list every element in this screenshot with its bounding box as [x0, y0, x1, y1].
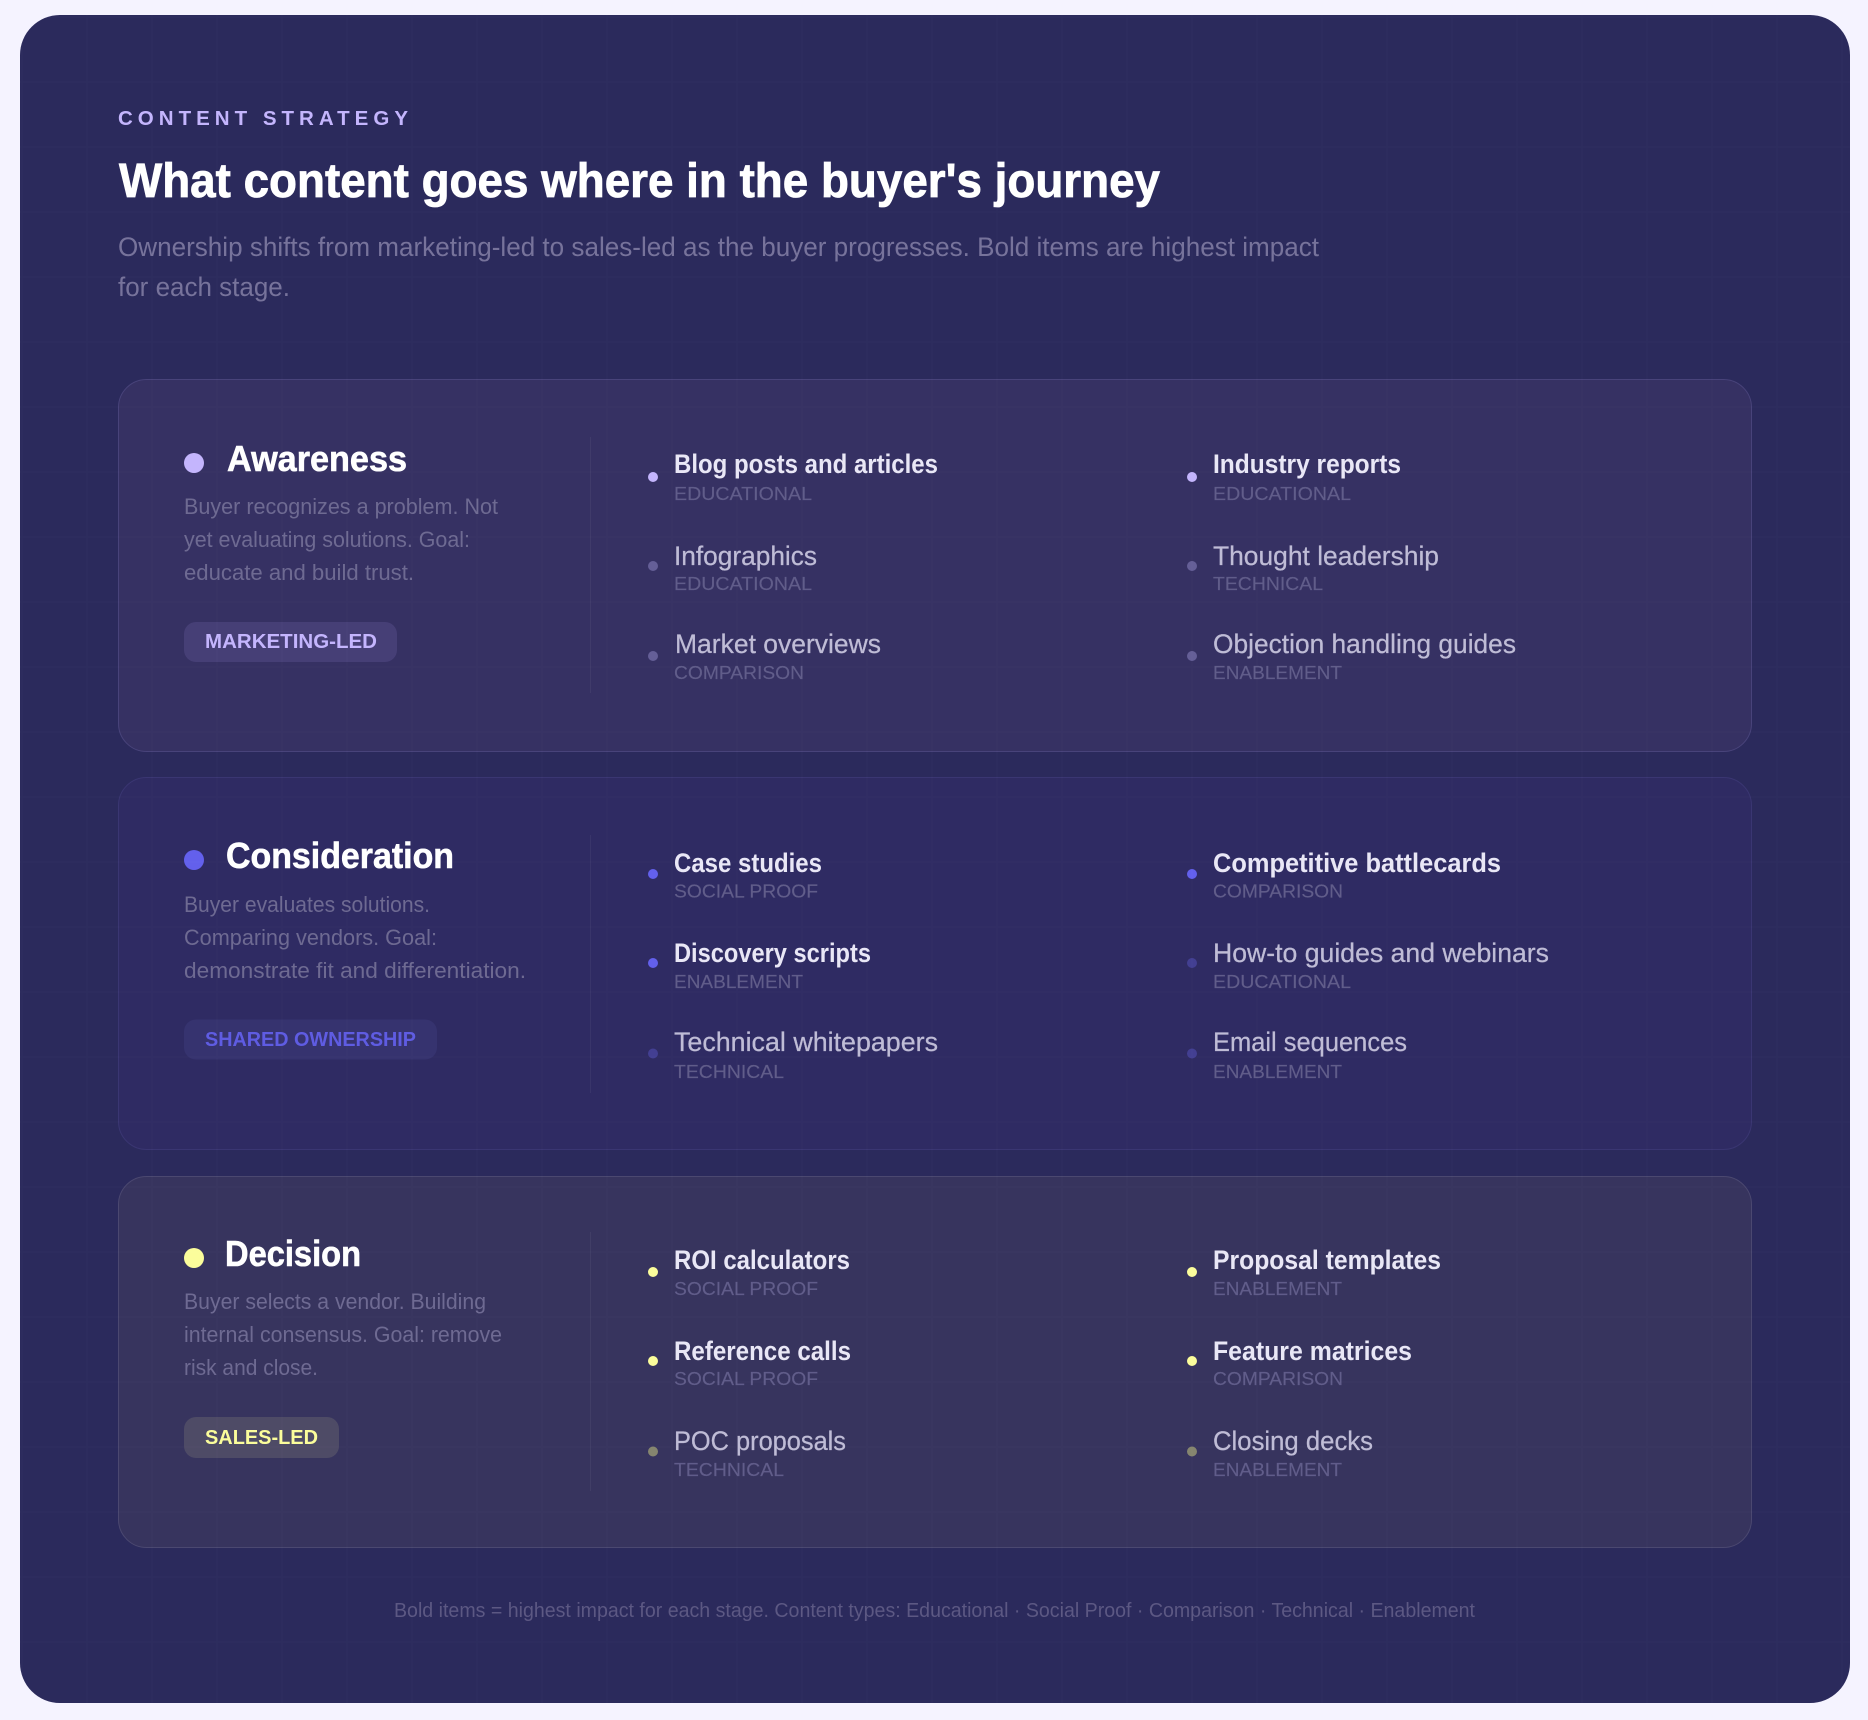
item: ROI calculators — [648, 1245, 850, 1299]
item: Thought leadership: Thought leadership — [1213, 541, 1439, 571]
item: Reference calls — [648, 1336, 851, 1389]
item: How-to guides and webinars: EDUCATIONAL — [1213, 971, 1351, 992]
item: Closing decks: Closing decks — [1213, 1426, 1373, 1456]
item: Case studies — [648, 848, 822, 902]
stage description: Buyer recognizes a problem. Not — [184, 494, 499, 519]
stage description — [184, 892, 526, 983]
item: Thought leadership — [1187, 541, 1439, 594]
item: Infographics: Infographics — [674, 541, 817, 571]
item: Discovery scripts: Discovery scripts — [674, 938, 871, 968]
title: What content goes where in the buyer's journey — [119, 155, 1160, 208]
item: Feature matrices: COMPARISON — [1213, 1368, 1343, 1389]
owner tag: SALES-LED — [205, 1426, 318, 1449]
item: Market overviews: Market overviews — [675, 629, 881, 659]
item: Technical whitepapers: Technical whitepapers — [674, 1027, 938, 1057]
eyebrow: CONTENT STRATEGY — [118, 107, 408, 130]
stage heading: Decision — [225, 1233, 361, 1274]
item: Feature matrices — [1187, 1336, 1412, 1389]
subtitle — [118, 232, 1319, 302]
item: Case studies: Case studies — [674, 848, 822, 878]
item: Infographics — [648, 541, 817, 594]
item: Blog posts and articles: EDUCATIONAL — [674, 483, 812, 504]
subtitle: Ownership shifts from marketing-led to sales-led as the buyer progresses. Bold items are highest impact — [118, 232, 1319, 262]
item: Objection handling guides: Objection handling guides — [1213, 629, 1516, 659]
item: POC proposals — [648, 1426, 846, 1480]
stage description: yet evaluating solutions. Goal: — [184, 527, 470, 552]
item: Industry reports — [1187, 449, 1401, 504]
stage description — [184, 494, 499, 585]
item: Closing decks — [1187, 1426, 1373, 1480]
item: Discovery scripts — [648, 938, 871, 992]
item: How-to guides and webinars — [1187, 938, 1549, 992]
stage dot — [184, 1248, 204, 1268]
item: POC proposals: POC proposals — [674, 1426, 846, 1456]
item: POC proposals: TECHNICAL — [674, 1459, 784, 1480]
item: ROI calculators: ROI calculators — [674, 1245, 850, 1275]
item: Closing decks: ENABLEMENT — [1213, 1459, 1342, 1480]
item: Objection handling guides: ENABLEMENT — [1213, 662, 1342, 683]
panel: Decision — [118, 1176, 1752, 1548]
item: Feature matrices: Feature matrices — [1213, 1336, 1412, 1366]
item: Industry reports: EDUCATIONAL — [1213, 483, 1351, 504]
stage heading: Awareness — [227, 438, 407, 479]
item: Competitive battlecards — [1187, 848, 1501, 902]
stage dot — [184, 850, 204, 870]
stage description — [184, 1289, 502, 1380]
stage description: Buyer evaluates solutions. — [184, 892, 430, 917]
subtitle: for each stage. — [118, 272, 290, 302]
item: Proposal templates: Proposal templates — [1213, 1245, 1441, 1275]
item: Discovery scripts: ENABLEMENT — [674, 971, 803, 992]
item: Reference calls: Reference calls — [674, 1336, 851, 1366]
footer note: Bold items = highest impact for each stage. Content types: Educational · Social Proof · Comparison · Technical · Enablement — [394, 1600, 1475, 1622]
item: Market overviews: COMPARISON — [674, 662, 804, 683]
owner tag — [184, 1417, 339, 1458]
item: Competitive battlecards: Competitive battlecards — [1213, 848, 1501, 878]
item: Industry reports: Industry reports — [1213, 449, 1401, 479]
stage description: demonstrate fit and differentiation. — [184, 958, 526, 983]
item: Email sequences — [1187, 1027, 1407, 1082]
stage description: educate and build trust. — [184, 560, 414, 585]
item: Email sequences: ENABLEMENT — [1213, 1061, 1342, 1082]
item: Objection handling guides — [1187, 629, 1516, 683]
stage heading: Consideration — [226, 835, 454, 876]
header — [118, 107, 1319, 302]
stage dot — [184, 453, 204, 473]
item: Proposal templates: ENABLEMENT — [1213, 1278, 1342, 1299]
item: Infographics: EDUCATIONAL — [674, 573, 812, 594]
item: Proposal templates — [1187, 1245, 1441, 1299]
item: Blog posts and articles — [648, 449, 938, 504]
item: ROI calculators: SOCIAL PROOF — [674, 1278, 818, 1299]
owner tag — [184, 622, 397, 662]
item: Competitive battlecards: COMPARISON — [1213, 880, 1343, 902]
item: Technical whitepapers — [648, 1027, 938, 1082]
item: Technical whitepapers: TECHNICAL — [674, 1061, 784, 1082]
item: Market overviews — [648, 629, 881, 683]
stage description: internal consensus. Goal: remove — [184, 1322, 502, 1347]
panel: Consideration — [118, 778, 1752, 1150]
stage description: Buyer selects a vendor. Building — [184, 1289, 486, 1314]
stage description: risk and close. — [184, 1355, 318, 1380]
owner tag — [184, 1020, 437, 1060]
item: Reference calls: SOCIAL PROOF — [674, 1368, 818, 1389]
item: Blog posts and articles: Blog posts and articles — [674, 449, 938, 479]
item: Case studies: SOCIAL PROOF — [674, 880, 818, 902]
stage description: Comparing vendors. Goal: — [184, 925, 437, 950]
owner tag: MARKETING-LED — [205, 630, 377, 653]
item: Email sequences: Email sequences — [1213, 1027, 1407, 1057]
owner tag: SHARED OWNERSHIP — [205, 1028, 416, 1051]
panel: Awareness — [118, 380, 1752, 752]
item: How-to guides and webinars: How-to guides and webinars — [1213, 938, 1549, 968]
item: Thought leadership: TECHNICAL — [1213, 573, 1323, 594]
